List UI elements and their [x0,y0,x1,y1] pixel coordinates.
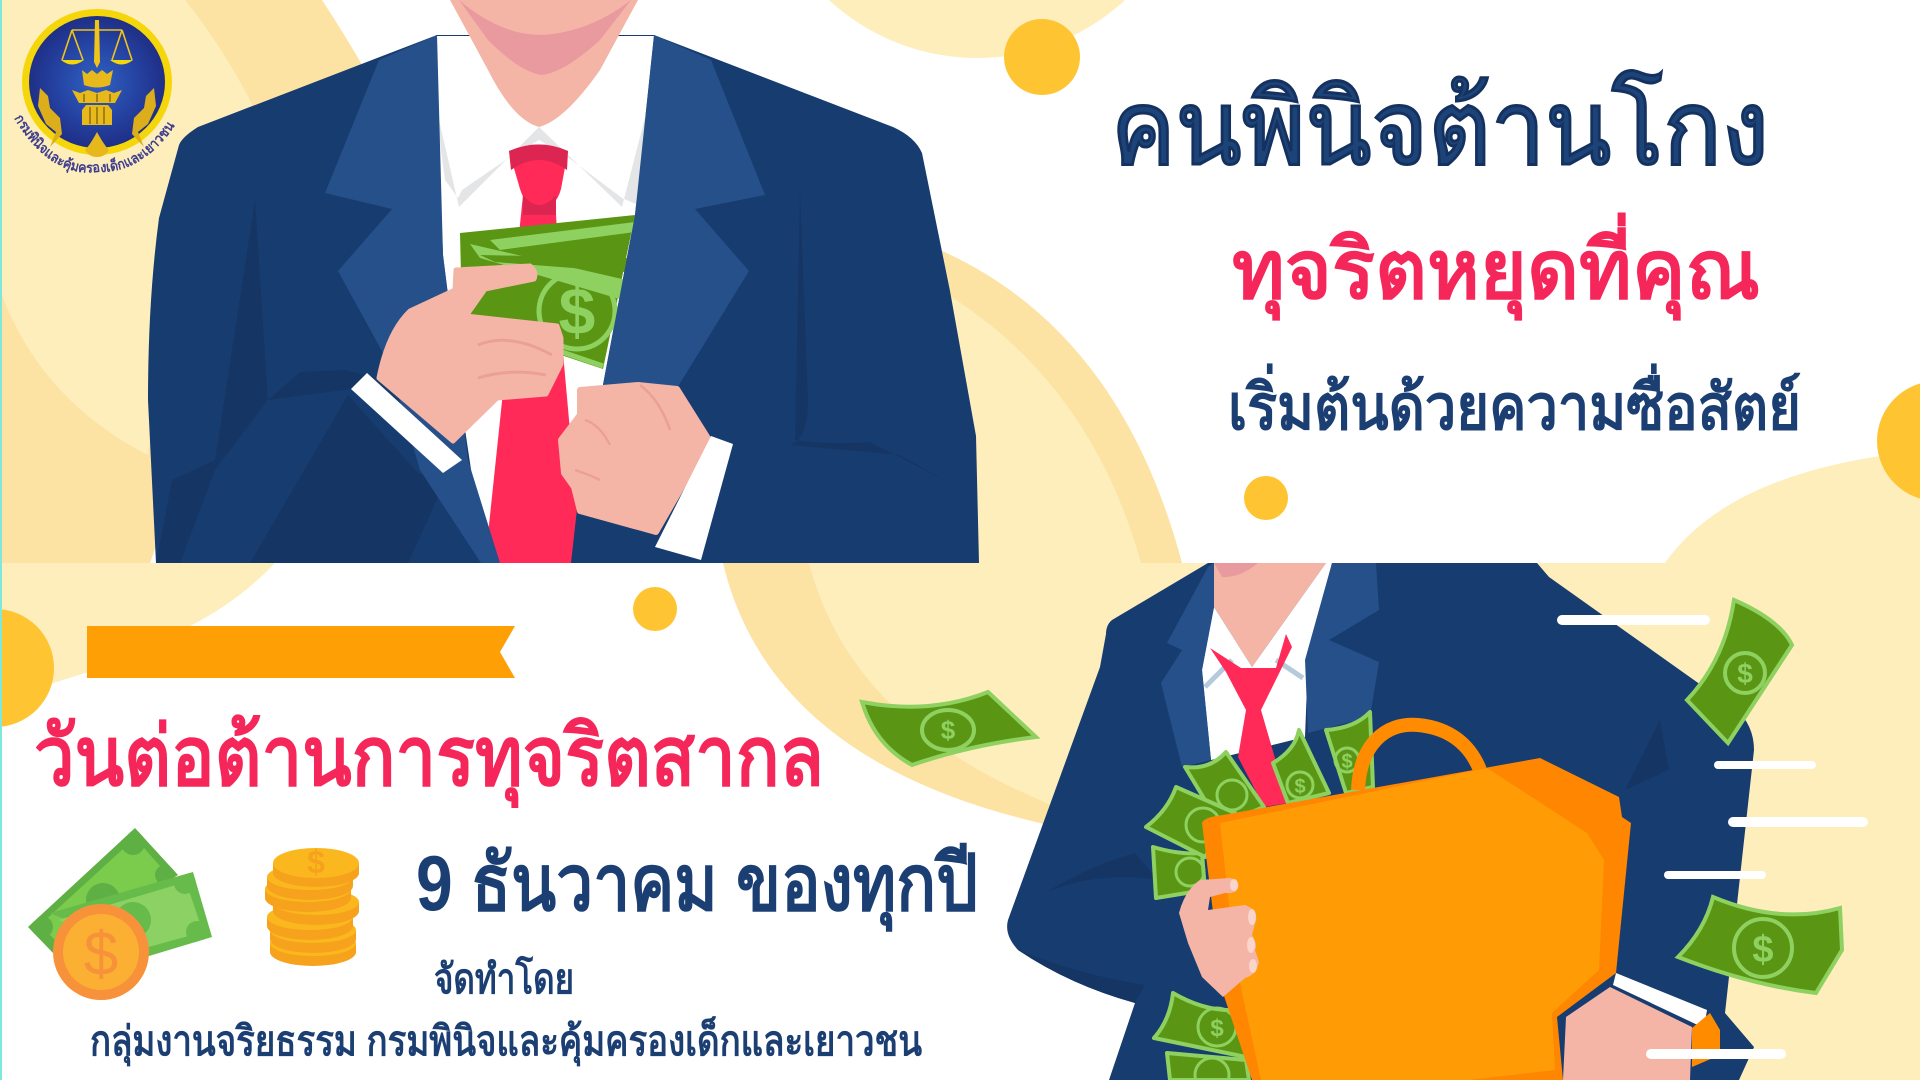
credit organisation: กลุ่มงานจริยธรรม กรมพินิจและคุ้มครองเด็กและเยาวชน [90,1016,922,1067]
panel: top background shapes [0,0,1920,563]
logo: department emblem: กรมพินิจและคุ้มครองเด็กและเยาวชน [14,116,175,174]
necktie [485,144,577,563]
right hand and cuff [1563,973,1720,1080]
speed lines [1557,615,1868,1059]
left lapel [325,35,500,563]
cash behind bag: $ [1294,776,1306,798]
emblem: scales [62,30,132,60]
left lapel [1161,563,1214,767]
collar shading [434,98,650,207]
icon: coin stack: $ [307,844,325,880]
necktie [1210,634,1292,807]
right lapel [603,35,765,420]
title: คนพินิจต้านโกง [1111,71,1769,187]
suit jacket [148,35,979,563]
right cuff [655,436,733,560]
left hand [351,266,561,473]
emblem: pedestal [72,70,122,125]
logo: department emblem [14,9,175,174]
heading: anti-corruption day: วันต่อต้านการทุจริตสากล [34,710,824,808]
figure: businessman with bag of cash [1007,563,1868,1080]
emblem text [14,118,180,173]
icon: coin stack [265,844,359,966]
cash held: $ [559,274,595,348]
flying bill: upper right [1687,600,1792,743]
cash behind bag: $ [1210,1015,1224,1042]
flying bill: upper right: $ [1737,658,1753,689]
emblem: nagas [38,88,156,147]
left hand [1179,878,1259,997]
left cuff [351,373,462,473]
cash behind bag: $ [1341,751,1353,773]
shirt [434,36,654,563]
neck shadow [459,0,631,75]
neck shadow [1214,563,1258,577]
flying bill: center [862,692,1036,765]
icon: banknotes with coin: $ [84,920,118,989]
ribbon banner [87,626,515,678]
shirt [1202,563,1332,760]
left edge strip [0,0,2,1080]
credit label: จัดทำโดย [434,955,574,1002]
flying bill: center: $ [941,715,956,745]
right lapel [1305,563,1379,733]
icon: banknotes with coin [28,828,212,1000]
neck [450,0,638,127]
cash held [460,215,680,400]
suit shadows [1018,720,1669,1003]
cash behind bag [1146,712,1373,1080]
panel: bottom background shapes [0,563,1920,1080]
flying bill: lower right [1678,897,1842,993]
right hand [561,385,733,560]
tagline: เริ่มต้นด้วยความซื่อสัตย์ [1228,363,1801,443]
subtitle: red: ทุจริตหยุดที่คุณ [1232,212,1760,321]
bag handle [1358,725,1480,790]
date: 9 ธันวาคม ของทุกปี [416,839,978,932]
collar shadow [1205,660,1303,687]
flying bill: lower right: $ [1752,929,1774,971]
neck [1214,563,1326,667]
bag [1202,758,1631,1080]
suit shadows [156,190,944,563]
suit jacket [1007,563,1754,1080]
figure: businessman pocketing cash [148,0,979,563]
emblem: lotus [85,132,109,157]
